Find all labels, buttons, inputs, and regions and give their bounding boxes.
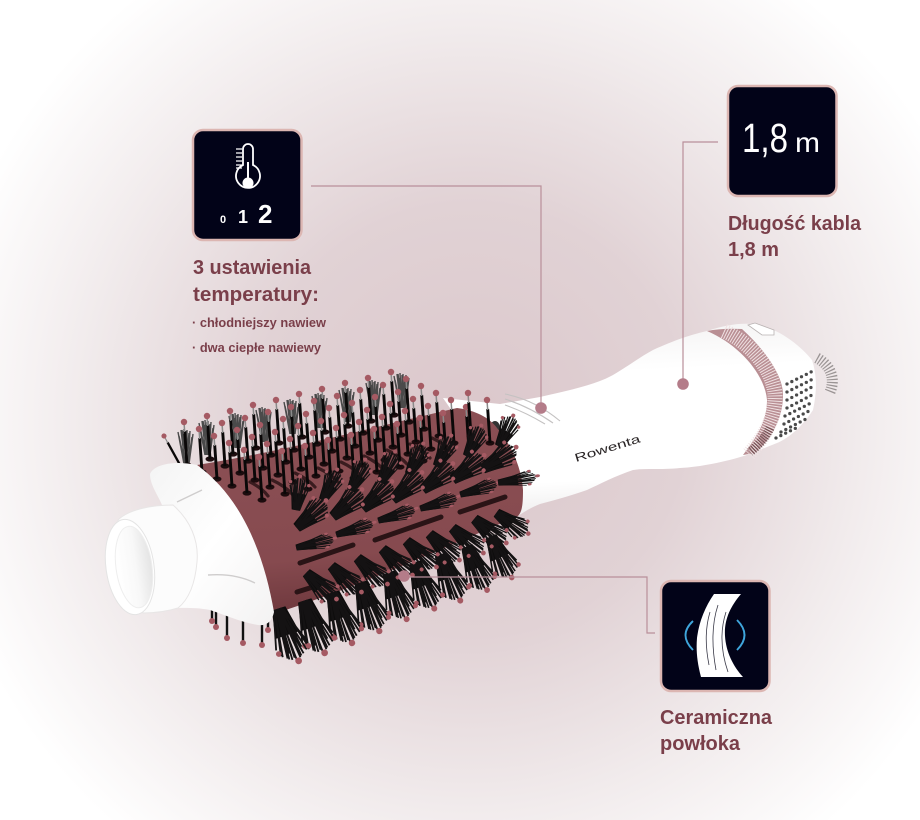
vent holes: [776, 371, 813, 438]
arched slots: [250, 438, 452, 496]
neck hole: [490, 421, 500, 435]
heading: temperature: temperatury:: [193, 284, 319, 306]
temperature scale: 0: [220, 214, 226, 226]
pins below cap: [209, 606, 271, 648]
dial button: [748, 323, 774, 335]
heading: cable length: 1,8 m: [728, 239, 779, 261]
list: temperature settings: · dwa ciepłe nawiewy: [192, 340, 322, 355]
temperature scale: 2: [258, 199, 272, 229]
heading: temperature: 3 ustawienia: [193, 257, 312, 279]
cable length value: 1,8: [742, 115, 788, 161]
barrel slots: [297, 497, 505, 592]
cap ridges: [177, 490, 255, 583]
cable length value: m: [795, 127, 820, 158]
nozzle: [100, 505, 197, 618]
middle tufts: [298, 502, 537, 611]
pin field: [181, 369, 495, 503]
heading: cable length: Długość kabla: [728, 213, 862, 235]
brand logo: Rowenta: [573, 433, 643, 465]
cord: [817, 358, 832, 392]
list: temperature settings: · chłodniejszy nawiew: [192, 315, 327, 330]
flat tufts: [294, 468, 541, 555]
handle grooves: [505, 394, 560, 424]
temperature scale: [220, 199, 272, 229]
callout line: cable: [677, 142, 718, 390]
icon: thermometer: [236, 144, 260, 188]
panel: ceramic icon: [661, 581, 770, 691]
callout line: ceramic: [398, 570, 655, 633]
hair dryer brush product: [100, 323, 832, 670]
heading: ceramic: Ceramiczna: [660, 707, 773, 729]
lower hanging tufts: [263, 530, 525, 670]
upright tufts: [284, 409, 525, 537]
panel: cable length icon: [728, 86, 836, 196]
icon: hair strand: [686, 594, 744, 677]
back bristles: [161, 373, 409, 470]
callout line: temperature: [311, 186, 547, 414]
rose ribbed band: [707, 329, 783, 455]
heading: ceramic: powłoka: [660, 733, 741, 755]
panel: temperature icon: [193, 130, 302, 240]
temperature scale: 1: [238, 207, 248, 227]
white cap: [150, 463, 274, 625]
ceramic barrel: [197, 408, 523, 614]
handle: [443, 324, 816, 516]
